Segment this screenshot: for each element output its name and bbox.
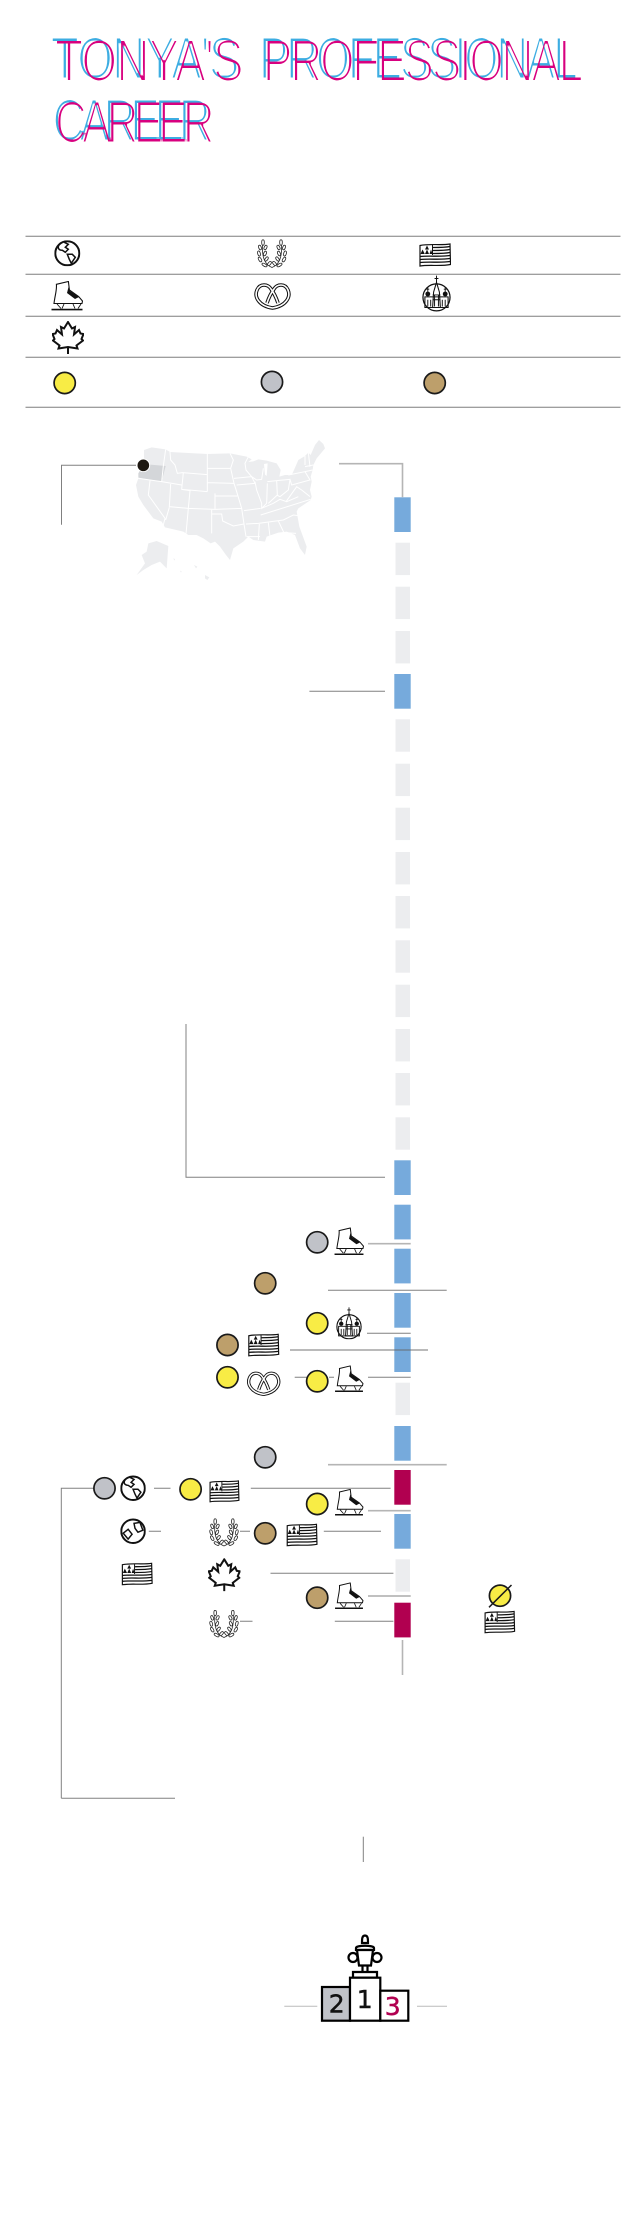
title: CAREER	[52, 88, 211, 154]
icon: maple leaf	[209, 1559, 240, 1591]
podium first place: 1	[357, 1985, 373, 2014]
title: CAREER	[55, 91, 215, 156]
connector lines	[61, 464, 447, 2006]
event: gold medal, flag	[180, 1479, 239, 1502]
event: gold medal, skate	[307, 1366, 363, 1392]
event: bronze medal, flag	[217, 1334, 279, 1356]
title: PROFESSIONAL	[263, 29, 583, 95]
title	[51, 26, 583, 156]
icon: pretzel	[256, 285, 289, 308]
event: bronze medal, skate	[307, 1583, 363, 1608]
podium second place: 2	[329, 1990, 345, 2019]
event: bronze medal	[255, 1273, 276, 1294]
map of the United States	[136, 440, 325, 580]
icon: flag	[122, 1563, 152, 1585]
icon: american flag	[420, 244, 450, 266]
title: TONYA'S	[51, 26, 239, 92]
event: silver medal	[255, 1447, 276, 1468]
icon: wreath	[209, 1519, 239, 1546]
icon: globe	[121, 1519, 145, 1543]
icon: moscow	[423, 276, 450, 311]
event: struck gold medal, flag	[485, 1585, 515, 1633]
title: TONYA'S	[55, 29, 244, 94]
event: gold medal, pretzel	[217, 1367, 279, 1394]
icon: wreath	[209, 1610, 239, 1638]
event: gold medal, moscow	[307, 1307, 361, 1339]
title: PROFESSIONAL	[259, 26, 578, 92]
event: silver medal, globe	[94, 1476, 145, 1500]
event: bronze medal, flag	[255, 1523, 317, 1546]
icon: skate	[52, 282, 82, 310]
icon: gold medal	[54, 372, 75, 394]
icon: wreath	[257, 240, 287, 268]
icon: bronze medal	[424, 372, 445, 394]
event: gold medal, skate	[307, 1489, 363, 1515]
event: silver medal, skate	[307, 1228, 363, 1254]
legend	[26, 236, 620, 407]
timeline bars	[394, 497, 411, 1637]
podium third place: 3	[385, 1992, 401, 2021]
podium with trophy	[322, 1936, 408, 2021]
icon: trophy	[348, 1936, 382, 1978]
icon: globe	[55, 241, 79, 265]
icon: silver medal	[261, 371, 283, 393]
icon: maple leaf	[52, 322, 84, 354]
